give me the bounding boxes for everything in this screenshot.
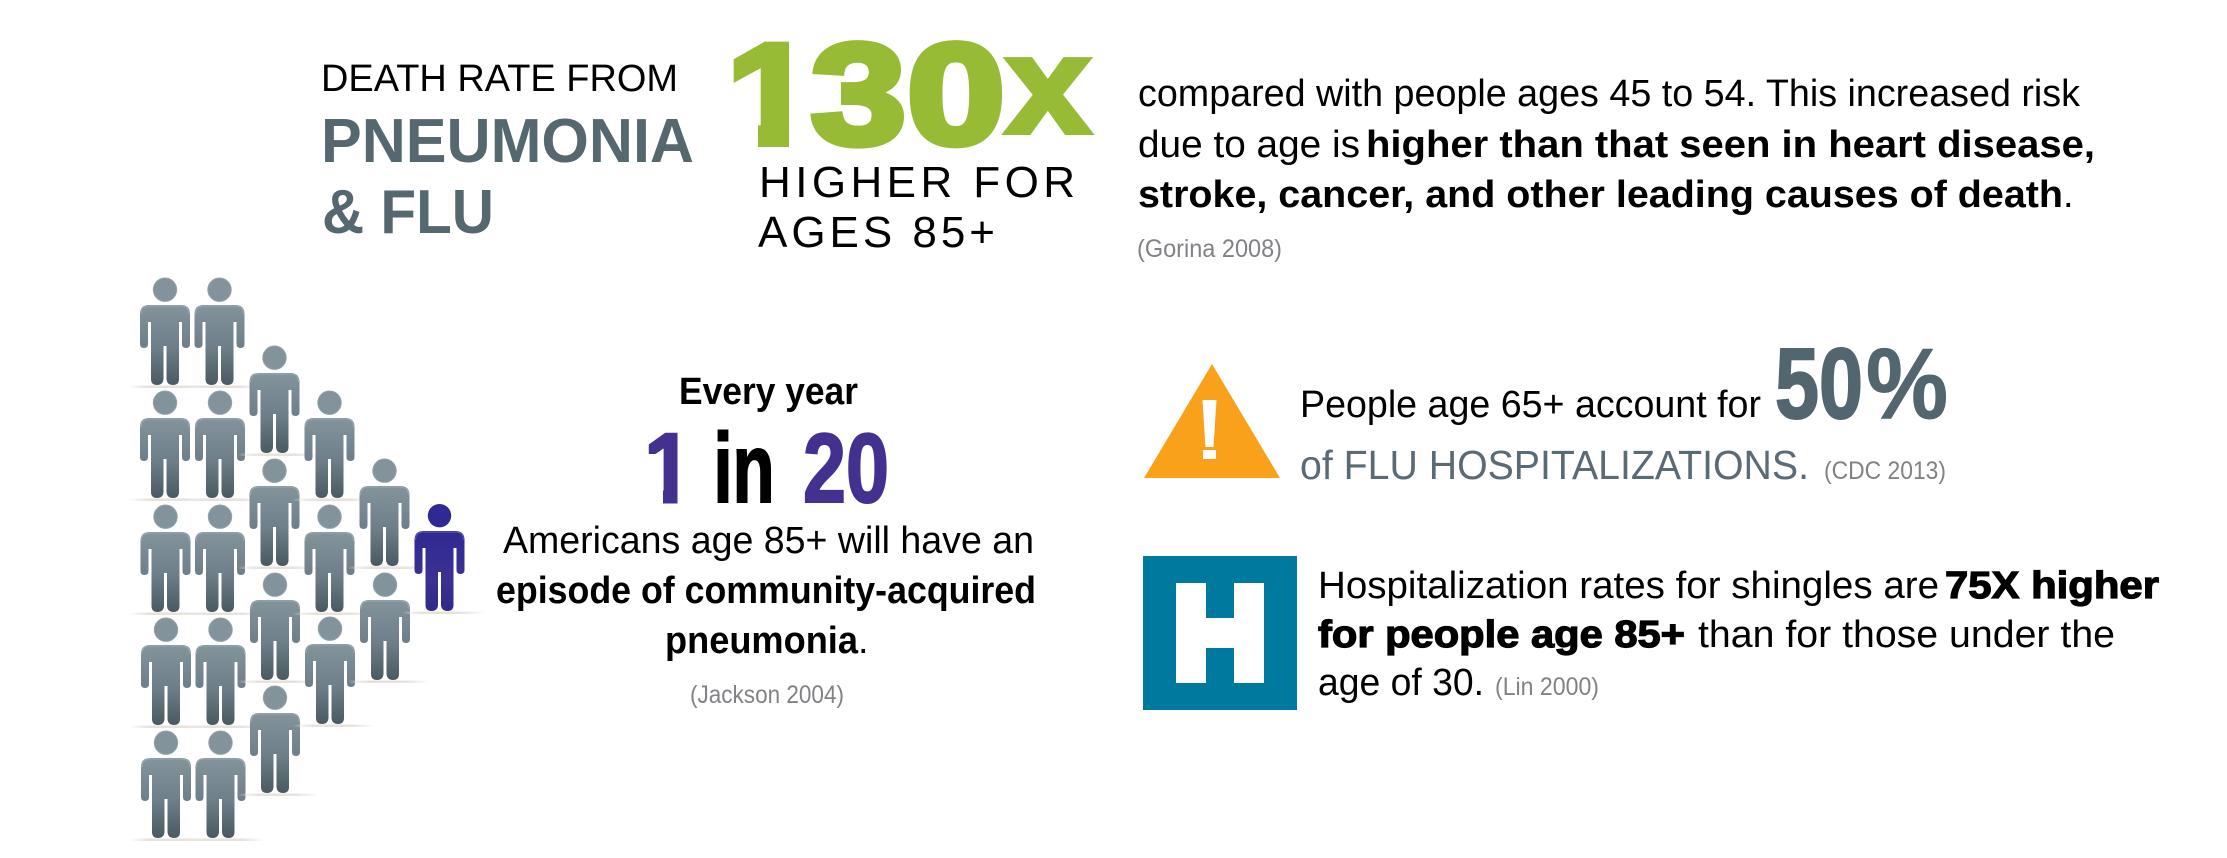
heading: death rate from pneumonia and flu: DEATH RATE FROM <box>321 58 678 100</box>
citation: CDC 2013: (CDC 2013) <box>1824 457 1946 485</box>
icon: warning triangle <box>1144 364 1280 478</box>
big stat: 50%: 50 <box>1775 328 1863 440</box>
big stat: 130x <box>734 40 1095 149</box>
big stat: 130x: 1 <box>726 16 818 174</box>
big stat: 1 in 20: in <box>714 413 774 523</box>
text block: community-acquired pneumonia: pneumonia <box>665 620 859 662</box>
subheading: higher for ages 85+: AGES 85+ <box>758 208 995 257</box>
text block: shingles hospitalization: for people age 85+ <box>1318 614 1685 656</box>
text block: community-acquired pneumonia <box>496 520 1036 662</box>
heading: death rate from pneumonia and flu <box>321 58 694 247</box>
text: people age 65+ account for: People age 65+ account for <box>1300 384 1761 426</box>
text block: shingles hospitalization: Hospitalization rates for shingles are <box>1318 565 1939 607</box>
citation: Lin 2000: (Lin 2000) <box>1495 673 1599 701</box>
citation: Gorina 2008: (Gorina 2008) <box>1137 235 1282 263</box>
big stat: 1 in 20 <box>648 430 887 504</box>
text block: comparison with people ages 45 to 54 <box>1138 73 2095 216</box>
text: every year: Every year <box>679 371 858 413</box>
text block: community-acquired pneumonia: episode of community-acquired <box>496 570 1036 612</box>
text: of flu hospitalizations: of FLU HOSPITALIZATIONS. <box>1300 442 1809 488</box>
text block: shingles hospitalization: 75X higher <box>1945 565 2159 607</box>
text block: comparison with people ages 45 to 54: due to age is <box>1138 124 1360 166</box>
big stat: 1 in 20: 20 <box>803 413 889 523</box>
citation: Jackson 2004: (Jackson 2004) <box>690 681 844 709</box>
text block: comparison with people ages 45 to 54: stroke, cancer, and other leading causes of death <box>1138 174 2063 216</box>
text block: comparison with people ages 45 to 54: higher than that seen in heart disease, <box>1366 124 2095 166</box>
text block: shingles hospitalization: than for those under the <box>1698 614 2115 656</box>
text block: community-acquired pneumonia: Americans age 85+ will have an <box>503 520 1034 562</box>
heading: death rate from pneumonia and flu: & FLU <box>322 178 494 247</box>
big stat: 130x: 3 <box>811 16 906 174</box>
big stat: 50% <box>1775 328 1948 440</box>
text block: comparison with people ages 45 to 54: . <box>2063 174 2074 216</box>
pictogram: crowd of people with one highlighted <box>128 278 484 841</box>
icon: hospital H <box>1143 556 1297 710</box>
text block: shingles hospitalization: age of 30. <box>1318 662 1484 704</box>
subheading: higher for ages 85+ <box>758 158 1075 257</box>
big stat: 130x: 0 <box>907 16 1005 174</box>
big stat: 50%: % <box>1866 328 1948 440</box>
text block: comparison with people ages 45 to 54: compared with people ages 45 to 54. This increased risk <box>1138 73 2081 115</box>
big stat: 1 in 20: 1 <box>644 413 694 523</box>
icon: highlighted person <box>402 504 484 614</box>
subheading: higher for ages 85+: HIGHER FOR <box>759 158 1075 207</box>
text block: community-acquired pneumonia: . <box>858 620 869 662</box>
big stat: 130x: x <box>1006 8 1090 162</box>
heading: death rate from pneumonia and flu: PNEUMONIA <box>321 107 694 176</box>
text block: shingles hospitalization <box>1318 565 2159 704</box>
